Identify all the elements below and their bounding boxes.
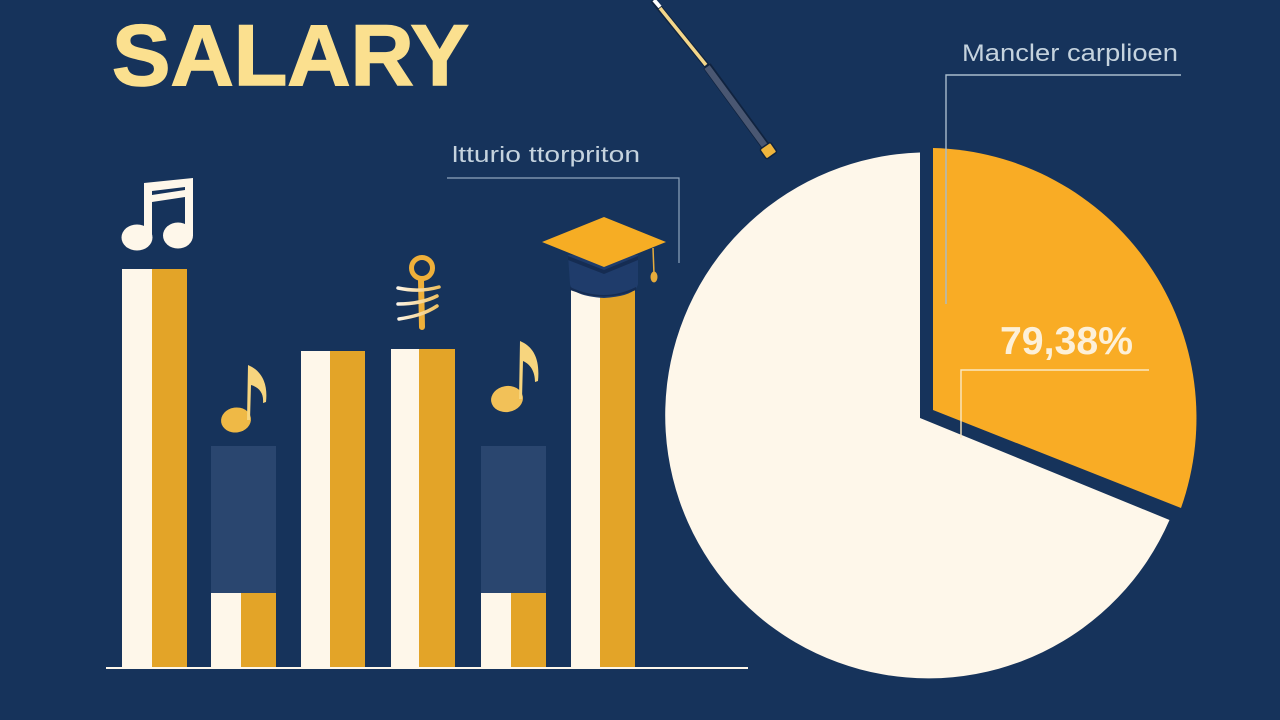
callout: right label [946,40,1181,304]
bar 5 [481,446,546,668]
icon: graduation cap [542,217,666,298]
pie slice: orange [933,148,1196,508]
callout: value leader line [961,370,1149,438]
percentage value: 79,38% [1000,320,1133,363]
callout: left label [447,142,679,263]
icon: treble key [398,258,439,327]
callout: left label: ltturio ttorpriton [452,142,640,167]
bar chart [106,269,748,669]
bar 3 [301,351,365,668]
bar 1 [122,269,187,668]
bar 6 [571,290,635,668]
callout: right label: Mancler carplioen [962,40,1178,67]
bar 2 [211,446,276,668]
icon: beamed music notes [122,178,193,250]
title: SALARY [112,8,469,104]
baseline [106,667,748,669]
icon: conductor baton [653,0,777,159]
icon: eighth note right [489,341,538,415]
bar 4 [391,349,455,668]
icon: eighth note left [219,365,266,434]
pie chart [665,148,1196,678]
pie slice: cream [665,152,1170,678]
